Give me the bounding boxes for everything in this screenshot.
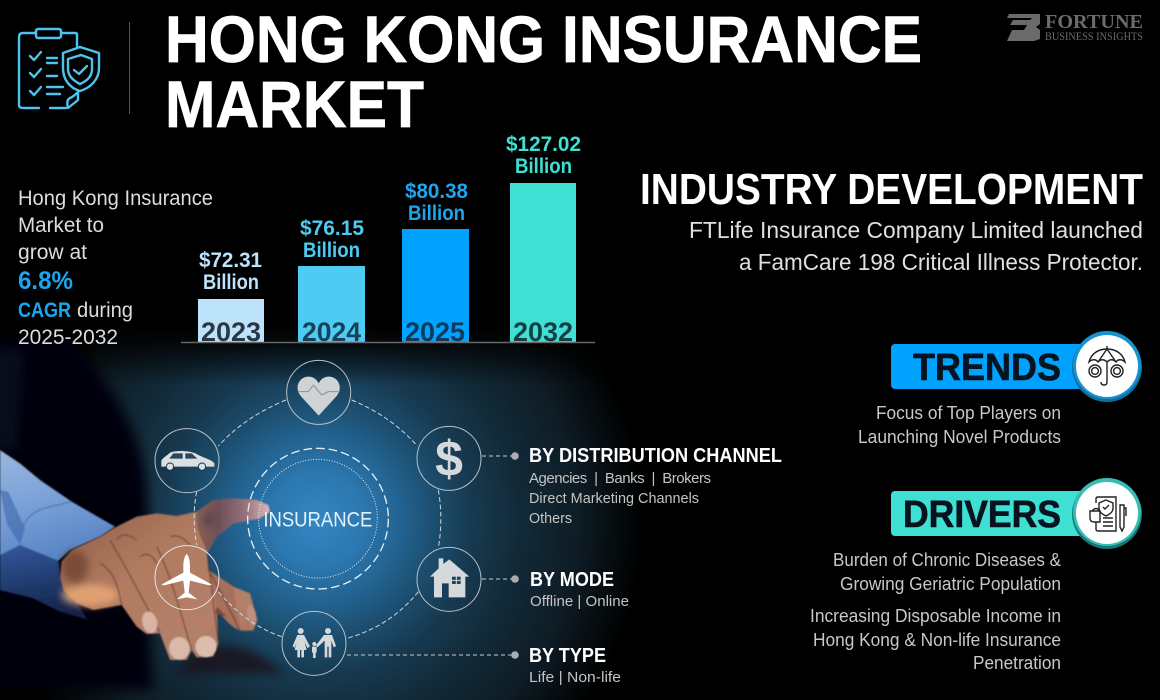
segment: by distribution channel: BY DISTRIBUTION CHANNEL (529, 445, 782, 467)
central dashed rings (248, 448, 388, 589)
title (165, 2, 922, 141)
bar 2025: Billion (408, 202, 465, 225)
industry development: FTLife Insurance Company Limited launched (689, 217, 1143, 243)
logo: Fortune Business Insights: FORTUNE (1045, 11, 1143, 33)
segment: by type (529, 645, 621, 686)
bar 2025: 2025 (405, 317, 465, 347)
bar 2025 (402, 180, 469, 347)
bar 2032: $127.02 (506, 133, 581, 156)
title: HONG KONG INSURANCE (165, 2, 922, 76)
segment: by mode: Offline | Online (530, 593, 629, 610)
bar chart (181, 133, 595, 347)
logo: Fortune Business Insights (1007, 11, 1143, 43)
bar 2023: Billion (203, 271, 259, 294)
header divider (128, 22, 130, 114)
bar 2024: Billion (303, 239, 360, 262)
icon: house (417, 547, 481, 611)
drivers badge (891, 478, 1142, 549)
bar 2024: 2024 (302, 317, 361, 347)
icon: airplane (155, 546, 219, 610)
dashed network ring (194, 400, 441, 638)
icon: clipboard with shield (19, 29, 99, 108)
trends text: Focus of Top Players on (876, 403, 1061, 423)
trends text: Launching Novel Products (858, 427, 1061, 447)
bar 2023 (198, 249, 264, 347)
CAGR text block: Market to (18, 214, 104, 237)
insurance label: INSURANCE (263, 509, 372, 532)
segment: by distribution channel: Agencies | Banks | Brokers (529, 470, 711, 487)
drivers text: Penetration (973, 653, 1061, 673)
bar 2024 (298, 217, 365, 347)
segment: by distribution channel: Direct Marketing Channels (529, 490, 699, 507)
CAGR text block: Hong Kong Insurance (18, 187, 213, 210)
title: MARKET (165, 67, 424, 141)
bar 2032 (506, 133, 581, 347)
segment: by mode (530, 569, 629, 610)
bar 2032: Billion (515, 155, 572, 178)
finger creases (100, 535, 240, 650)
CAGR text block: 6.8% (18, 267, 73, 295)
drivers text: Growing Geriatric Population (840, 574, 1061, 594)
drivers badge: DRIVERS (903, 494, 1061, 536)
hand (60, 498, 270, 661)
fingernails (140, 610, 159, 635)
industry development (640, 165, 1143, 275)
bar 2024: $76.15 (300, 217, 364, 240)
icon: umbrella with coins (1089, 346, 1125, 385)
CAGR text block: CAGR (18, 299, 71, 322)
logo: Fortune Business Insights: BUSINESS INSIGHTS (1045, 31, 1143, 43)
segment: by type: BY TYPE (529, 645, 606, 667)
CAGR text block: 2025-2032 (18, 326, 118, 349)
segment: by type: Life | Non-life (529, 669, 621, 686)
CAGR text block: during (77, 299, 133, 322)
CAGR text block (18, 187, 213, 349)
segment: by distribution channel (529, 445, 782, 527)
drivers text (810, 550, 1061, 673)
icon: dollar: $ (435, 431, 463, 487)
drivers text: Increasing Disposable Income in (810, 606, 1061, 626)
icon: dollar (417, 426, 481, 490)
trends badge: TRENDS (913, 347, 1061, 389)
sleeve and cuff (0, 450, 115, 619)
bar 2023: 2023 (201, 317, 261, 347)
bar 2025: $80.38 (405, 180, 468, 203)
drivers text: Hong Kong & Non-life Insurance (813, 630, 1061, 650)
photo: hand touching insurance network (0, 325, 650, 700)
icon: heart (287, 360, 351, 424)
segment: by distribution channel: Others (529, 510, 572, 527)
bar 2023: $72.31 (199, 249, 262, 272)
icon: car (155, 429, 219, 493)
drivers text: Burden of Chronic Diseases & (833, 550, 1061, 570)
trends text (858, 403, 1061, 447)
trends badge (891, 331, 1142, 402)
bar 2032: 2032 (513, 317, 573, 347)
segment: by mode: BY MODE (530, 569, 614, 591)
icon: family (282, 611, 346, 675)
segment leader lines (347, 452, 519, 659)
industry development: a FamCare 198 Critical Illness Protector. (739, 249, 1143, 275)
icon: policy document (1090, 497, 1126, 531)
CAGR text block: grow at (18, 241, 87, 264)
